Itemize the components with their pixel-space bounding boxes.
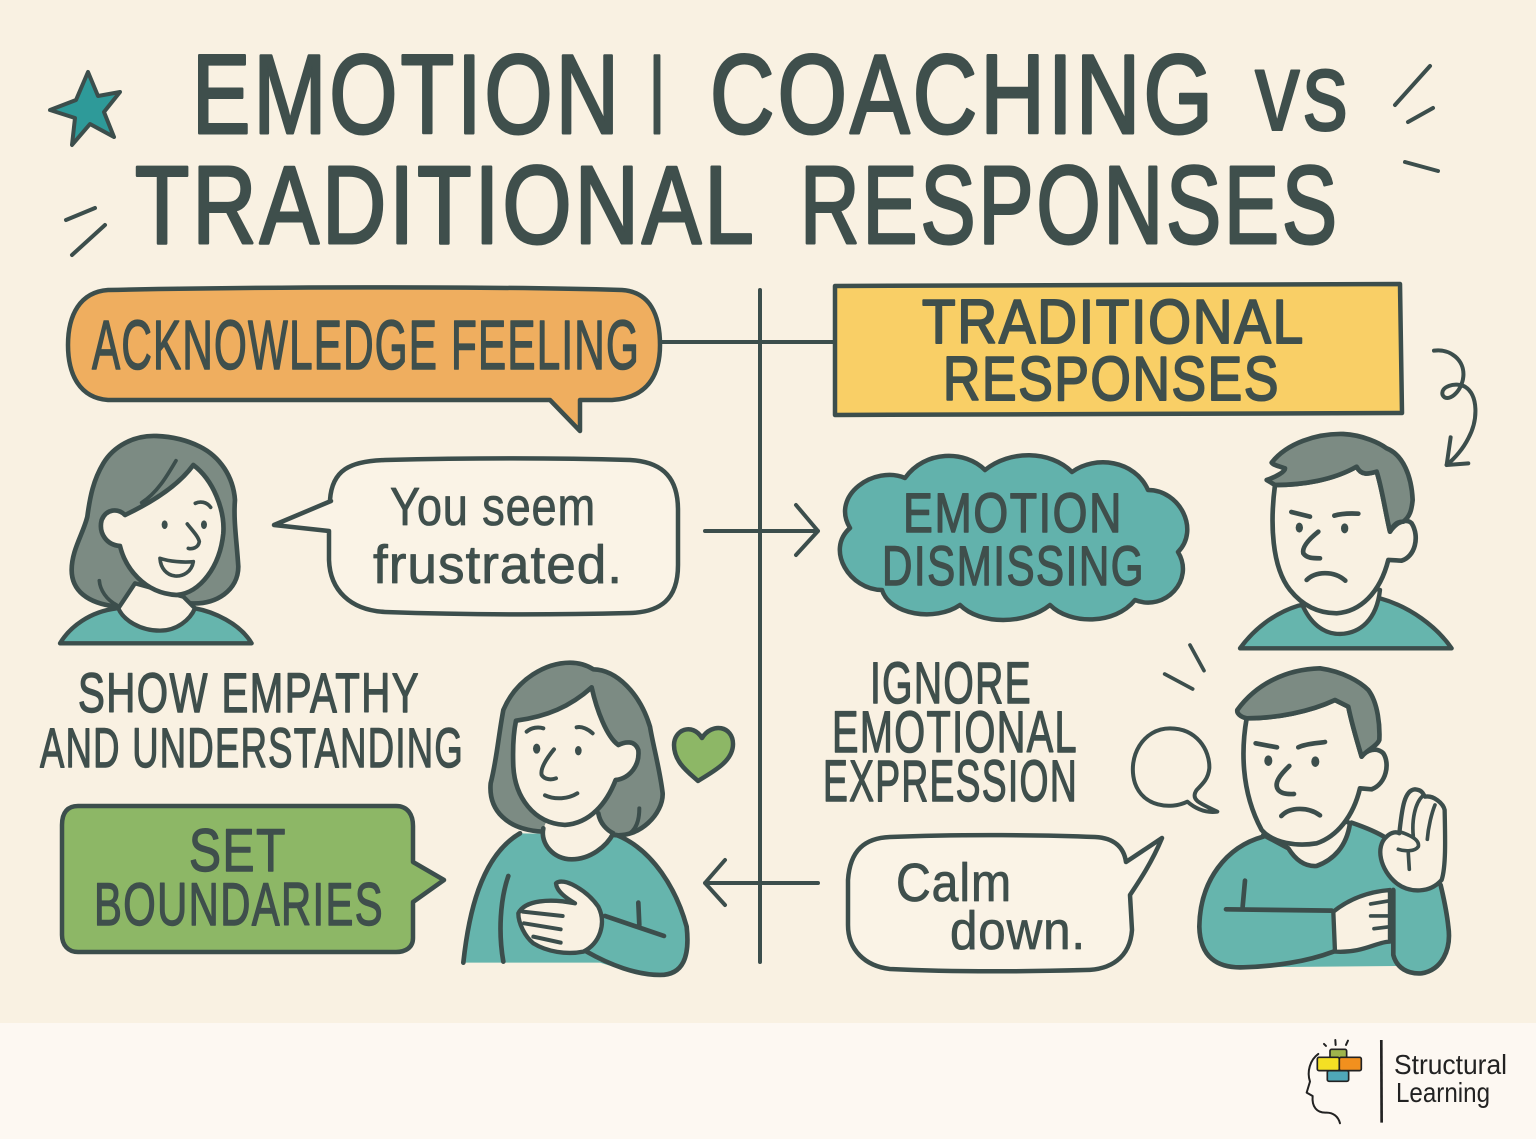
- text: show empathy and understanding: SHOW EMPATHY: [78, 661, 420, 724]
- speech bubble: calm down: [848, 835, 1162, 971]
- cloud: emotion dismissing: [840, 455, 1187, 620]
- icon: heart: [674, 728, 733, 781]
- arrow left: [705, 860, 818, 905]
- person: empathetic woman with hand on chest: [463, 663, 687, 975]
- speech bubble: calm down: down.: [950, 901, 1086, 961]
- callout: set boundaries: SET: [189, 817, 287, 884]
- speech bubble: you seem frustrated: [274, 458, 678, 614]
- heading box: traditional responses: RESPONSES: [943, 345, 1280, 414]
- decorative sparks left: [66, 208, 105, 255]
- heading box: traditional responses: [835, 284, 1402, 415]
- callout: set boundaries: [62, 806, 444, 952]
- text: ignore emotional expression: IGNORE: [870, 651, 1032, 716]
- title: [135, 29, 1351, 267]
- speech bubble: calm down: Calm: [896, 853, 1012, 913]
- callout: set boundaries: BOUNDARIES: [94, 871, 384, 938]
- speech bubble: you seem frustrated: frustrated.: [373, 535, 623, 595]
- person: frowning man: [1240, 434, 1452, 648]
- title: RESPONSES: [800, 144, 1340, 267]
- cloud: emotion dismissing: DISMISSING: [882, 534, 1145, 597]
- title: I: [649, 32, 667, 157]
- cloud: emotion dismissing: EMOTION: [903, 481, 1123, 544]
- title: COACHING: [710, 32, 1216, 157]
- icon: head with blocks: [1307, 1040, 1361, 1123]
- logo wordmark: Learning: [1396, 1077, 1490, 1108]
- logo wordmark: Structural: [1394, 1049, 1507, 1080]
- decorative sparks top right: [1395, 66, 1438, 171]
- icon: star: [50, 72, 120, 145]
- arrow right: [705, 505, 818, 555]
- speech bubble: you seem frustrated: You seem: [390, 477, 596, 537]
- text: ignore emotional expression: EMOTIONAL: [832, 700, 1078, 765]
- callout: acknowledge feeling: ACKNOWLEDGE FEELING: [92, 306, 640, 384]
- text: ignore emotional expression: [823, 651, 1078, 814]
- text: ignore emotional expression: EXPRESSION: [823, 749, 1078, 814]
- title: TRADITIONAL: [135, 144, 757, 267]
- text: show empathy and understanding: AND UNDERSTANDING: [40, 716, 464, 779]
- person: man raising hand: [1133, 645, 1449, 974]
- title: vs: [1255, 29, 1351, 154]
- heading box: traditional responses: TRADITIONAL: [922, 288, 1305, 357]
- central divider: [660, 290, 834, 962]
- callout: acknowledge feeling: [68, 287, 660, 431]
- title: EMOTION: [192, 32, 622, 157]
- person: woman saying you seem frustrated: [60, 436, 252, 643]
- logo wordmark: [1394, 1049, 1507, 1108]
- text: show empathy and understanding: [40, 661, 464, 779]
- icon: curly arrow: [1434, 350, 1475, 465]
- logo: structural learning: [1307, 1040, 1382, 1123]
